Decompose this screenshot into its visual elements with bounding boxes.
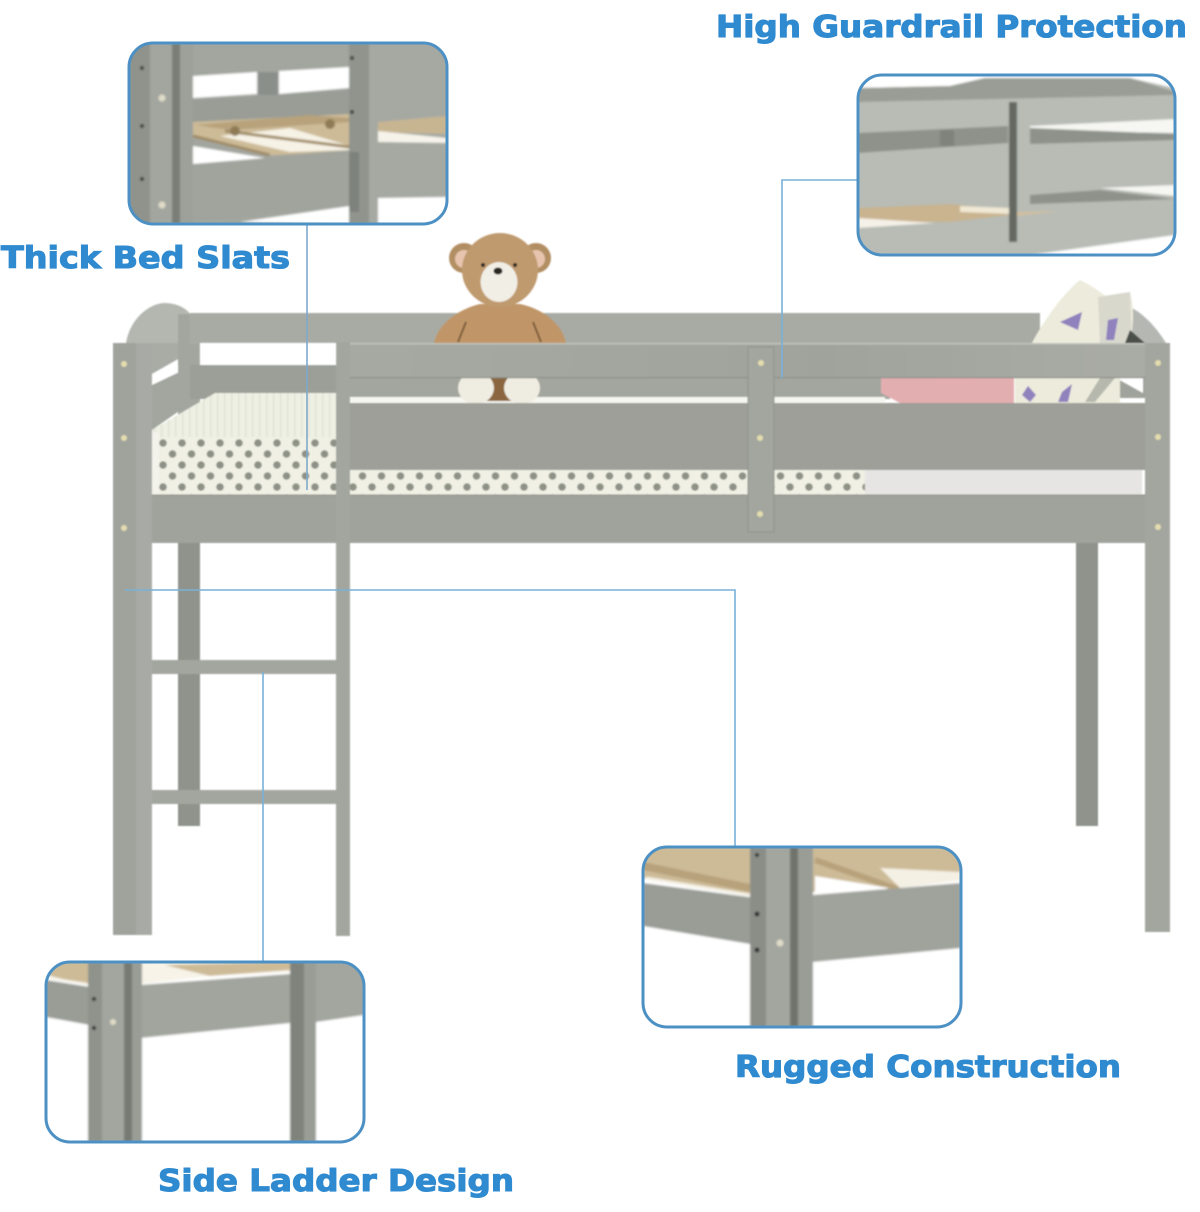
- pillow: [1015, 280, 1145, 403]
- bear head: [462, 233, 538, 307]
- panel: side ladder close-up: [46, 962, 364, 1142]
- panel: thick bed slats close-up: [129, 43, 447, 224]
- bear face: [481, 263, 517, 274]
- front guard panels: [150, 343, 1146, 543]
- right headboard: [1115, 305, 1166, 398]
- panel: high guardrail close-up: [858, 75, 1175, 255]
- mattress: [152, 393, 1142, 495]
- label: high guardrail protection: High Guardrail Protection: [716, 10, 1187, 45]
- connector: bed slats: [306, 224, 308, 490]
- bear ears: [449, 243, 551, 273]
- back legs: [178, 543, 1098, 826]
- connector: construction: [125, 590, 735, 848]
- bear legs: [458, 372, 540, 404]
- back guardrail: [190, 313, 1040, 399]
- bolts: [121, 360, 1161, 531]
- left front post: [113, 343, 152, 935]
- label: thick bed slats: Thick Bed Slats: [1, 241, 290, 276]
- bear arms: [458, 322, 541, 342]
- panel: rugged construction close-up: [643, 847, 961, 1027]
- ladder: [150, 342, 350, 936]
- right front post: [1145, 343, 1170, 932]
- pink pillow: [881, 378, 1014, 403]
- guardrail upright: [748, 347, 774, 532]
- connector: ladder: [262, 672, 264, 962]
- connector lines: [125, 180, 858, 962]
- label: side ladder design: Side Ladder Design: [158, 1164, 514, 1199]
- bear body: [434, 304, 566, 343]
- connector: guardrail: [782, 180, 858, 378]
- bear muzzle: [480, 262, 518, 302]
- loft bed illustration: [113, 233, 1170, 936]
- teddy bear: [434, 233, 566, 343]
- left headboard: [126, 303, 200, 434]
- label: rugged construction: Rugged Construction: [735, 1050, 1121, 1085]
